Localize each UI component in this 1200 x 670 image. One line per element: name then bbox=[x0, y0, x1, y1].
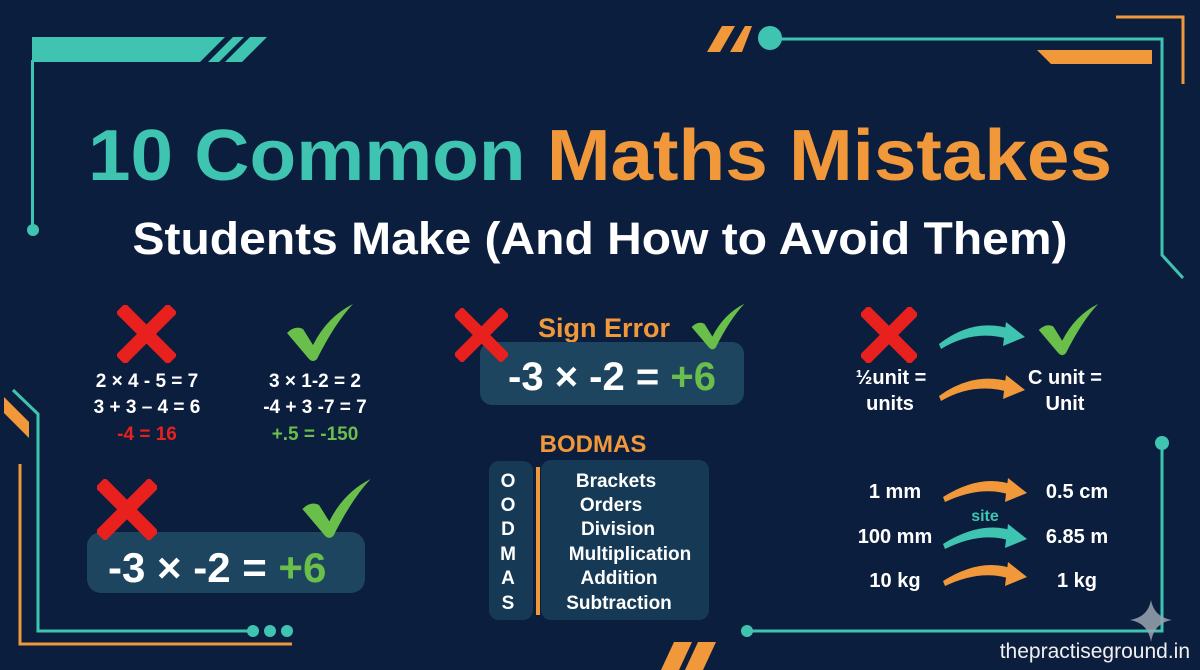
wrong equations bbox=[94, 371, 200, 445]
panel: BODMAS: Orders bbox=[580, 495, 642, 516]
panel: BODMAS bbox=[489, 431, 709, 620]
panel: unit conversions: 10 kg bbox=[869, 570, 921, 592]
panel: unit conversions: 1 kg bbox=[1057, 570, 1097, 592]
icon: sparkle bbox=[1130, 600, 1172, 642]
arrow: orange bbox=[939, 375, 1025, 401]
decoration: left frame bbox=[4, 390, 293, 644]
panel: unit conversions: 100 mm bbox=[858, 526, 932, 548]
footer url: thepractiseground.in bbox=[1000, 640, 1190, 663]
icon: correct check bbox=[287, 304, 353, 361]
panel: BODMAS: O bbox=[501, 495, 515, 516]
panel: BODMAS: Subtraction bbox=[566, 593, 672, 614]
icon: check bbox=[302, 479, 371, 538]
panel: unit conversions: site bbox=[971, 508, 999, 525]
panel: unit conversions: 1 mm bbox=[869, 481, 921, 503]
panel: unit errors: units bbox=[866, 393, 914, 415]
panel: BODMAS: Addition bbox=[580, 568, 658, 589]
wrong equations: -4 = 16 bbox=[117, 424, 177, 445]
heading: sign error: Sign Error bbox=[538, 313, 670, 343]
panel: BODMAS: S bbox=[502, 593, 514, 614]
correct equations: 3 × 1-2 = 2 bbox=[269, 371, 361, 392]
wrong equations: 3 + 3 – 4 = 6 bbox=[94, 397, 200, 418]
correct equations bbox=[263, 371, 367, 445]
correct equations: +.5 = -150 bbox=[272, 424, 358, 445]
panel: unit conversions: 6.85 m bbox=[1046, 526, 1108, 548]
decoration: top-right frame bbox=[707, 17, 1183, 278]
panel: BODMAS: M bbox=[500, 544, 516, 565]
icon: check bbox=[1039, 304, 1098, 355]
panel: BODMAS: Multiplication bbox=[569, 544, 691, 565]
panel: unit errors: ½unit = bbox=[856, 367, 926, 389]
arrow: teal bbox=[939, 322, 1025, 349]
panel: wrong vs right equations bbox=[94, 304, 367, 445]
subtitle: Students Make (And How to Avoid Them) bbox=[132, 213, 1068, 264]
icon: wrong cross bbox=[125, 313, 168, 355]
panel: sign error: -3 × -2 = +6 bbox=[508, 355, 716, 399]
icon: cross bbox=[868, 314, 910, 356]
heading: BODMAS: BODMAS bbox=[540, 431, 646, 458]
icon: check bbox=[692, 304, 744, 349]
panel: BODMAS: Division bbox=[581, 519, 655, 540]
title: 10 Common Maths Mistakes bbox=[88, 116, 1112, 196]
panel: BODMAS: A bbox=[501, 568, 515, 589]
panel: bottom-left sign equation bbox=[87, 479, 371, 593]
panel: unit errors: Unit bbox=[1046, 393, 1085, 415]
panel: unit errors bbox=[856, 304, 1102, 415]
arrows bbox=[943, 478, 1027, 502]
panel: sign error bbox=[462, 304, 744, 405]
panel: unit conversions bbox=[858, 478, 1108, 592]
panel: BODMAS: O bbox=[501, 471, 515, 492]
panel: bottom-left sign equation: -3 × -2 = +6 bbox=[108, 544, 326, 591]
panel: unit conversions: 0.5 cm bbox=[1046, 481, 1108, 503]
correct equations: -4 + 3 -7 = 7 bbox=[263, 397, 367, 418]
panel: BODMAS: D bbox=[501, 519, 515, 540]
decoration: bottom-right frame bbox=[661, 436, 1169, 670]
panel: unit errors: C unit = bbox=[1028, 367, 1102, 389]
decoration: top-left frame bbox=[27, 37, 267, 236]
icon: cross bbox=[105, 488, 149, 532]
icon: cross bbox=[462, 316, 501, 354]
wrong equations: 2 × 4 - 5 = 7 bbox=[96, 371, 198, 392]
panel: BODMAS: Brackets bbox=[576, 471, 656, 492]
